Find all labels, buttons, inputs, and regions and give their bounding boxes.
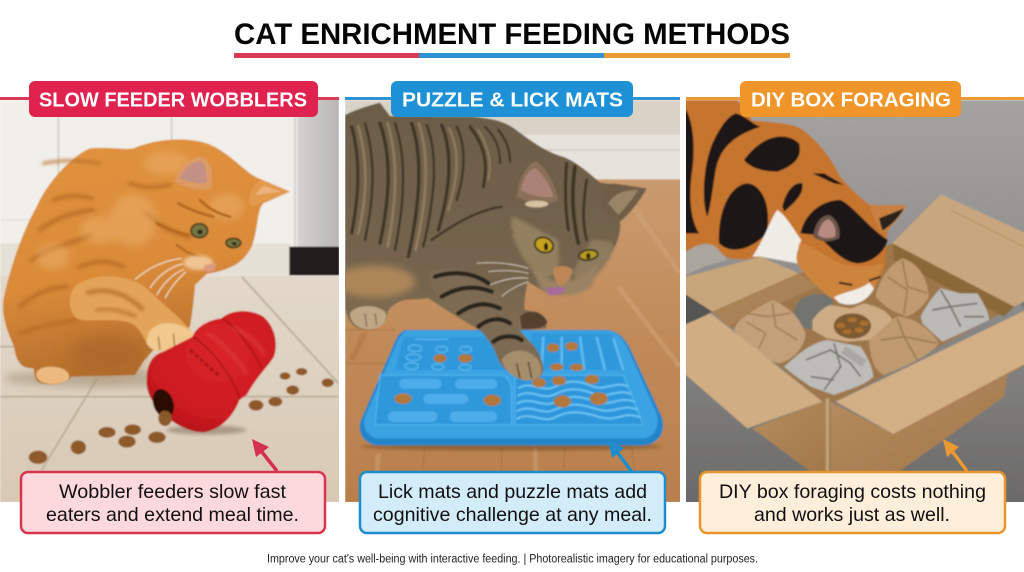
orange cat [3,139,290,384]
ear right [611,182,640,188]
grey flank [684,244,727,276]
whiskers [135,258,186,298]
white chest [752,210,801,263]
muzzle [834,283,874,305]
newspaper balls [784,288,989,395]
badge: slow feeder wobblers: SLOW FEEDER WOBBLERS [39,88,307,112]
cheek [797,243,884,304]
wobbler shadow [167,425,247,435]
room background [345,100,682,503]
callout: diy box: DIY box foraging costs nothing [719,481,986,503]
badge: diy box foraging: DIY BOX FORAGING [751,88,951,112]
closed eyes [839,277,881,285]
box interior [712,243,1014,402]
callout: lick mats [360,472,665,533]
paws [350,306,386,329]
header rule: blue [345,97,680,100]
newspaper ball back [794,294,834,330]
footer note: Improve your cat's well-being with interactive feeding. | Photorealistic imagery for educational purposes. [267,554,758,566]
fur stripes [20,161,190,333]
badge: puzzle and lick mats [391,81,633,117]
paw [147,323,192,351]
calico cat [684,100,907,305]
ear left [517,162,558,204]
nose and tongue [553,266,572,286]
arrow: orange [943,439,967,471]
box back flaps [684,194,1024,312]
panel: diy box foraging [684,81,1024,533]
ear left [175,157,212,190]
photo: tabby cat with lick mat [335,100,682,503]
callout: lick mats: Lick mats and puzzle mats add [378,481,647,503]
mat bones [393,384,492,417]
hind paw [36,367,69,384]
kitchen background [0,97,340,503]
carpet [684,100,1024,503]
black patches [684,107,888,263]
tabby cat [345,102,647,331]
photo: orange cat with red wobbler [0,97,340,503]
callout: wobbler: eaters and extend meal time. [46,504,299,526]
callout: wobbler: Wobbler feeders slow fast [59,481,287,503]
toy opening [152,388,175,416]
arrow: red [252,439,277,471]
header rule: orange [686,97,1024,100]
badge: diy box foraging [740,81,961,117]
ears [813,215,840,241]
mat waves [517,382,641,419]
mat shadow [362,443,662,451]
tabby foreleg over mat [430,269,543,380]
red wobbler toy [147,311,276,432]
callout: lick mats: cognitive challenge at any meal. [373,504,652,526]
callout: diy box: and works just as well. [754,504,950,526]
toy lettering shape [190,350,220,377]
mat rings [405,339,472,370]
dark stripes [352,123,615,257]
light bands [358,123,490,250]
cat shadow [3,369,197,388]
eyes [191,224,241,248]
muzzle and nose [183,255,213,270]
treats on mat [394,342,608,407]
whiskers [477,263,528,297]
header rule: red [0,97,339,100]
arrow: blue [608,440,632,472]
foreleg [69,276,192,343]
callout: wobbler [21,472,325,533]
mat slots [542,337,623,370]
face [511,217,558,280]
ear right [248,180,287,207]
callout: diy box [700,472,1005,533]
dark shade under body [70,335,143,372]
eyes [533,235,598,261]
lick mat [360,330,663,445]
tan belly [335,266,415,298]
photo: calico cat with cardboard box [684,100,1024,503]
crumpled paper balls [734,258,939,375]
panel: slow feeder wobblers [0,81,340,533]
title: CAT ENRICHMENT FEEDING METHODS [234,18,790,51]
panel: puzzle and lick mats [335,81,682,533]
title underline [234,53,790,58]
kibble pieces [29,368,334,464]
box front flaps and sides [684,309,1024,472]
badge: slow feeder wobblers [29,81,318,117]
face markings [157,200,230,257]
badge: puzzle and lick mats: PUZZLE & LICK MATS [402,88,623,112]
light fur [37,152,243,270]
